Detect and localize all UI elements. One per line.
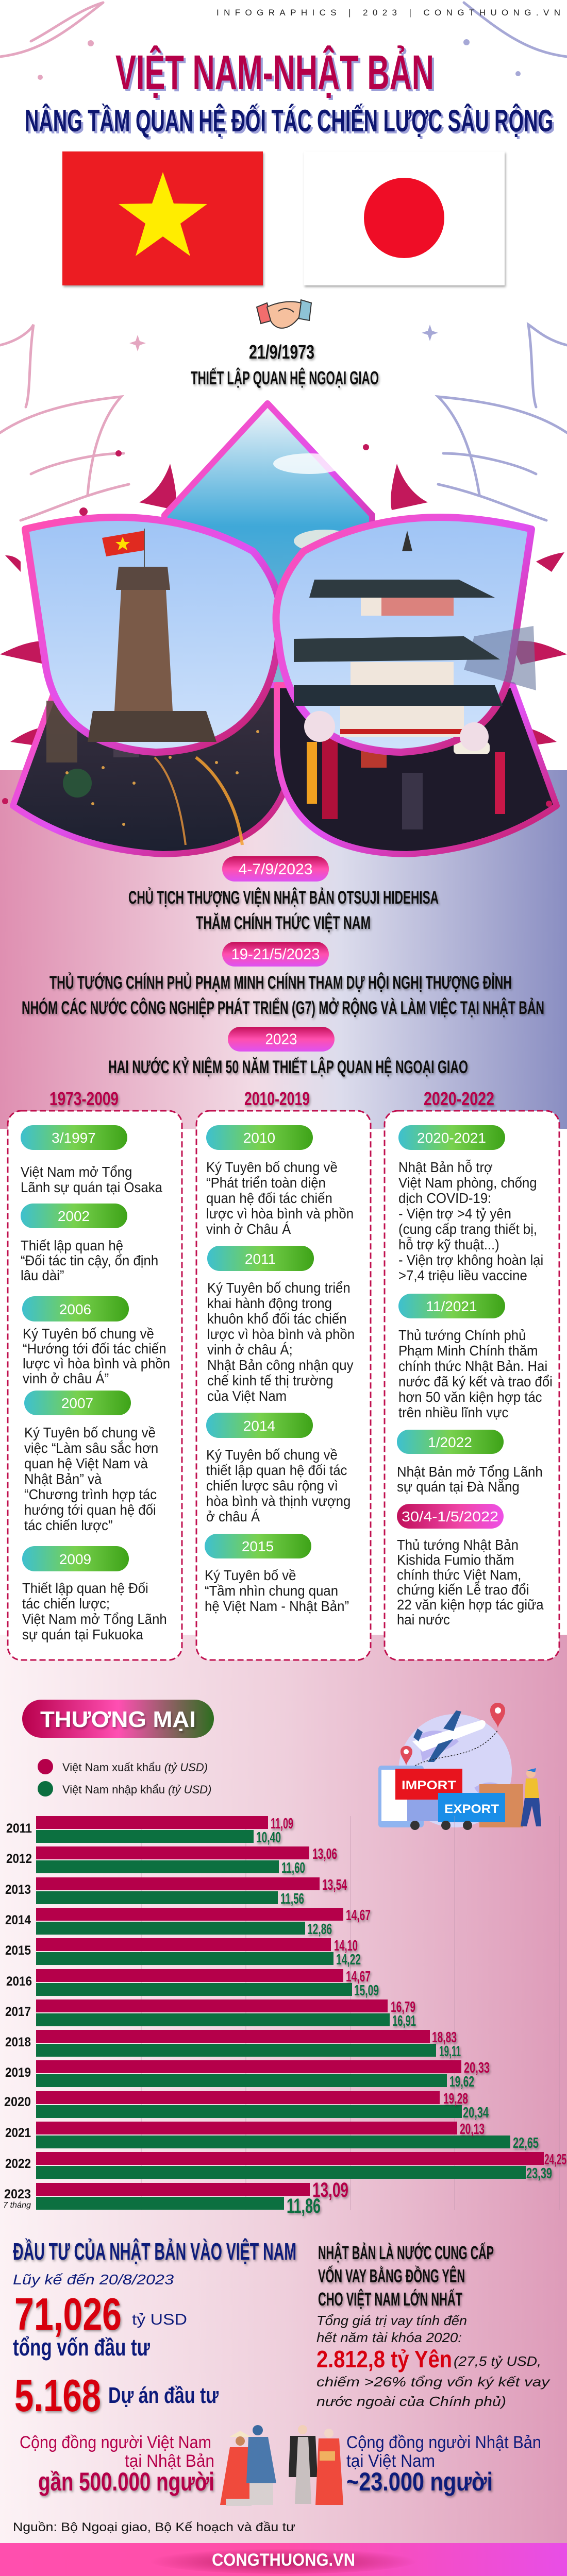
bar chart: trade 2011-2023: 12,86 [307,1921,332,1938]
community: Vietnamese in Japan: tại Nhật Bản [125,2451,214,2471]
petal: pagoda [276,517,536,752]
panel: 2010-2019 timeline: Nhật Bản công nhận quy [207,1357,354,1373]
year labels: 2013 [5,1883,31,1897]
text: establish diplomatic relations: THIẾT LẬP QUAN HỆ NGOẠI GIAO [191,367,379,388]
period headings [49,1088,494,1109]
header tagline: INFOGRAPHICS | 2023 | CONGTHUONG.VN [216,8,560,18]
panel: 2020-2022 timeline: Nhật Bản hỗ trợ [398,1159,493,1175]
panel: 1973-2009 timeline: Việt Nam mở Tổng [21,1164,132,1180]
community: Japanese in Vietnam: tại Việt Nam [346,2451,435,2471]
value labels: 20,33 [464,2060,490,2076]
panel: 2010-2019 timeline: của Việt Nam [207,1388,287,1404]
panel: 2010-2019 timeline [196,1111,371,1660]
panel: 2010-2019 timeline: lược vì hòa bình và phồn [206,1206,354,1222]
panel: 1973-2009 timeline: Thiết lập quan hệ Đối [22,1580,148,1596]
footer: CONGTHUONG.VN [212,2550,355,2570]
panel: 2010-2019 timeline: “Tầm nhìn chung quan [205,1583,338,1599]
panel: 2010-2019 timeline: “Phát triển toàn diện [206,1175,326,1191]
panel: 2020-2022 timeline: hai nước [397,1612,450,1628]
value labels: 19,28 [443,2091,468,2107]
value labels: 14,67 [346,1907,371,1924]
panel: 1973-2009 timeline: Việt Nam mở Tổng Lãnh [22,1611,167,1627]
bar chart: trade 2011-2023: 14,22 [336,1952,361,1968]
year labels: 2022 [5,2157,31,2171]
icon: import/export illustration: EXPORT [444,1802,499,1816]
pill 3/1997: 3/1997 [52,1130,96,1146]
value labels: 18,83 [432,2029,457,2046]
investment stats: 71,026 [14,2289,122,2340]
value labels: 13,09 [312,2179,348,2201]
value labels: 11,09 [271,1816,293,1832]
panel: 1973-2009 timeline: “Đối tác tin cậy, ổn định [21,1252,158,1268]
panel: 1973-2009 timeline: việc “Làm sâu sắc hơn [24,1439,158,1456]
panel: 1973-2009 timeline: “Hướng tới đối tác chiến [23,1341,166,1357]
decorative swirls [0,3,567,520]
panel: 2020-2022 timeline: Thủ tướng Chính phủ [398,1327,526,1343]
value labels: 16,79 [391,1999,415,2015]
flag: Vietnam [62,151,263,285]
bar chart: trade 2011-2023: 11,86 [287,2195,321,2217]
date 21/9/1973: 21/9/1973 [249,342,314,363]
panel: 1973-2009 timeline: 2007 [61,1395,93,1411]
leaves behind [0,464,567,747]
panel: 2010-2019 timeline: 2011 [245,1251,276,1267]
yen loan panel: 2.812,8 tỷ Yên [316,2346,452,2372]
investment stats: tỷ USD [132,2311,187,2328]
yen loan panel [316,2242,551,2409]
panel: 2010-2019 timeline: 2014 [243,1418,275,1434]
panel: 2010-2019 timeline: hệ Việt Nam - Nhật Bản” [205,1598,349,1614]
heading: THƯƠNG MẠI: THƯƠNG MẠI [40,1707,196,1732]
panel: 2020-2022 timeline: Nhật Bản mở Tổng Lãnh [397,1464,543,1480]
panel: 1973-2009 timeline: lược vì hòa bình và phồn [23,1355,170,1371]
period headings: 2020-2022 [424,1088,494,1109]
value labels [271,1816,566,2201]
icon: import/export illustration: IMPORT [402,1778,456,1792]
bar chart: trade 2011-2023: 10,40 [256,1829,281,1846]
panel: 2020-2022 timeline: Phạm Minh Chính thăm [398,1343,538,1359]
bar chart: trade 2011-2023: 19,11 [439,2043,461,2060]
investment stats: 5.168 [14,2370,101,2421]
panel: 2010-2019 timeline: chế kinh tế thị trường [207,1372,333,1388]
panel: 2020-2022 timeline: 30/4-1/5/2022 [402,1509,498,1524]
panel: 2020-2022 timeline: chứng kiến Lễ trao đổi [397,1581,529,1598]
community: Vietnamese in Japan [20,2433,214,2496]
panel: 2020-2022 timeline: 11/2021 [426,1298,477,1314]
panel: 1973-2009 timeline: Thiết lập quan hệ [21,1238,123,1253]
panel: 2020-2022 timeline: - Viện trợ không hoàn lại [398,1252,543,1268]
panel: 1973-2009 timeline: 2002 [58,1208,90,1224]
panel: 1973-2009 timeline: tác chiến lược” [24,1517,112,1533]
legend [38,1759,211,1797]
period headings: 1973-2009 [49,1088,119,1109]
panel: 2020-2022 timeline: chính thức Nhật Bản. Hai [398,1358,547,1374]
community: Japanese in Vietnam: Cộng đồng người Nhật Bản [346,2433,541,2452]
year labels: 2014 [5,1913,31,1927]
pill: 2023 [228,1027,335,1052]
yen loan panel: VỐN VAY BẰNG ĐỒNG YÊN [318,2265,465,2286]
yen loan panel: nước ngoài của Chính phủ) [316,2394,506,2409]
value labels: 13,06 [312,1846,337,1862]
source: Nguồn: Bộ Ngoại giao, Bộ Kế hoạch và đầu tư [13,2520,295,2534]
panel: 2010-2019 timeline: khuôn khổ đối tác chiến [207,1311,347,1327]
bar chart: trade 2011-2023: 11,56 [280,1891,304,1907]
year labels: 2023 [4,2187,31,2201]
panel: 2020-2022 timeline [385,1111,559,1660]
panel: 1973-2009 timeline: Ký Tuyên bố chung về [24,1425,156,1440]
yen loan panel: hết năm tài khóa 2020: [316,2330,462,2345]
icon: import/export illustration [378,1703,541,1830]
heading: Japanese investment in Vietnam: ĐẦU TƯ CỦA NHẬT BẢN VÀO VIỆT NAM [13,2238,296,2265]
value labels: 14,67 [346,1969,371,1985]
lotus photo collage [0,403,567,854]
panel: 2010-2019 timeline: vinh ở Châu Á [206,1221,291,1237]
year labels: 2017 [5,2005,31,2019]
panel: 2010-2019 timeline: Ký Tuyên bố chung triển [207,1280,351,1296]
panel: 2020-2022 timeline: 2020-2021 [417,1130,486,1146]
panel: 2010-2019 timeline: ở châu Á [206,1509,260,1524]
legend: Việt Nam nhập khẩu (tỷ USD) [62,1783,211,1796]
panel: 2010-2019 timeline: lược vì hòa bình và phồn [207,1326,355,1342]
yen loan panel: Tổng giá trị vay tính đến [316,2313,467,2328]
year labels: 2011 [6,1821,32,1836]
year labels [3,1821,32,2210]
bar chart: trade 2011-2023: 23,39 [526,2165,552,2182]
bar chart: trade 2011-2023: 20,34 [463,2105,489,2121]
investment stats [13,2272,219,2421]
bar chart: trade 2011-2023: 19,62 [449,2074,474,2090]
illustration: people in traditional dress [220,2425,343,2506]
panel: 2020-2022 timeline: Việt Nam phòng, chống [398,1175,537,1191]
yen loan panel: CHO VIỆT NAM LỚN NHẤT [318,2288,462,2310]
panel: 2010-2019 timeline: thiết lập quan hệ đối tác [206,1462,347,1478]
legend: Việt Nam xuất khẩu (tỷ USD) [62,1761,208,1774]
panel: 1973-2009 timeline: Ký Tuyên bố chung về [23,1326,154,1342]
panel: 1973-2009 timeline: sự quán tại Fukuoka [22,1626,143,1642]
investment stats: Lũy kế đến 20/8/2023 [13,2272,174,2287]
year labels: 2018 [5,2035,31,2049]
panel: 2020-2022 timeline: Thủ tướng Nhật Bản [397,1537,519,1553]
panel: 2010-2019 timeline: quan hệ đối tác chiến [206,1190,332,1206]
panel: 1973-2009 timeline: vinh ở châu Á” [23,1370,109,1386]
panel: 1973-2009 timeline: quan hệ Việt Nam và [24,1455,148,1471]
panel: 1973-2009 timeline: 2006 [59,1301,91,1317]
panel: 1973-2009 timeline: 2009 [59,1551,91,1567]
value labels: 13,54 [322,1877,347,1893]
yen loan panel: chiếm >26% tổng vốn ký kết vay [316,2374,551,2389]
community: Japanese in Vietnam: ~23.000 người [346,2467,493,2496]
panel: 2010-2019 timeline: 2015 [242,1538,274,1554]
event text: Otsuji Hidehisa visit: THĂM CHÍNH THỨC VIỆT NAM [196,912,371,933]
footer [0,2543,567,2576]
investment stats: tổng vốn đầu tư [13,2334,151,2361]
bar chart: trade 2011-2023: 11,60 [281,1860,305,1876]
panel: 2010-2019 timeline: khai hành động trong [207,1295,332,1311]
bar chart: trade 2011-2023 [3,1816,566,2217]
panel: 1973-2009 timeline: lâu dài” [21,1267,64,1283]
value labels: 20,13 [460,2121,485,2138]
petal: top sky [164,403,372,711]
panel: 2020-2022 timeline: (cung cấp trang thiết bị, [398,1221,537,1237]
petal: bottom-left night city [13,685,293,854]
panel: 1973-2009 timeline: Lãnh sự quán tại Osaka [21,1179,162,1195]
panel: 2020-2022 timeline: trên nhiều lĩnh vực [398,1404,508,1420]
panel: 2010-2019 timeline: 2010 [243,1130,275,1146]
year labels: 2012 [6,1852,32,1866]
panel: 1973-2009 timeline: Nhật Bản” và [24,1471,102,1487]
yen loan panel: (27,5 tỷ USD, [454,2353,541,2369]
pill: 4-7/9/2023 [222,856,329,882]
pill 3/1997 [21,1125,127,1150]
panel: 2020-2022 timeline: dịch COVID-19: [398,1190,491,1206]
petal: Hanoi flag tower [25,517,280,752]
petal: bottom-right Shibuya street [277,685,557,854]
panel: 2020-2022 timeline: 22 văn kiện hợp tác giữa [397,1597,544,1613]
community: Vietnamese in Japan: gần 500.000 người [38,2467,214,2496]
event text: Otsuji Hidehisa visit [128,887,439,933]
year labels: 7 tháng [3,2201,31,2210]
panel: 2020-2022 timeline: - Viện trợ >4 tỷ yên [398,1206,511,1222]
panel: 1973-2009 timeline [8,1111,182,1660]
panel: 1973-2009 timeline: “Chương trình hợp tác [24,1486,157,1502]
panel: 2010-2019 timeline: hòa bình và thịnh vượng [206,1493,351,1509]
year labels: 2020 [4,2095,31,2109]
panel: 2010-2019 timeline: chiến lược sâu rộng vì [206,1478,338,1494]
panel: 2020-2022 timeline: hỗ trợ kỹ thuật...) [398,1236,499,1252]
year labels: 2019 [5,2065,31,2080]
panel: 2020-2022 timeline: Kishida Fumio thăm [397,1552,514,1568]
pill: 19-21/5/2023: 19-21/5/2023 [231,946,320,963]
bar chart: trade 2011-2023: 22,65 [513,2135,539,2151]
panel: 2010-2019 timeline: Ký Tuyên bố chung về [206,1447,338,1463]
panel: 1973-2009 timeline: hướng tới quan hệ đối [24,1502,156,1518]
year labels: 2015 [5,1943,31,1958]
panel: 2020-2022 timeline: >7,4 triệu liều vaccine [398,1267,527,1283]
bar chart: trade 2011-2023: 16,91 [392,2013,416,2029]
panel: 2020-2022 timeline: sự quán tại Đà Nẵng [397,1478,520,1495]
panel: 2020-2022 timeline: chính thức Việt Nam, [397,1567,521,1583]
icon: handshake [257,300,311,328]
panel: 2010-2019 timeline: vinh ở châu Á; [207,1342,293,1358]
panel: 2020-2022 timeline: 1/2022 [428,1434,472,1450]
heading: THƯƠNG MẠI [22,1700,214,1738]
year labels: 2021 [5,2126,31,2140]
period headings: 2010-2019 [244,1088,310,1109]
pill: 19-21/5/2023 [222,942,329,967]
event text: G7 summit [22,972,544,1018]
panel: 2010-2019 timeline: Ký Tuyên bố về [205,1567,296,1583]
bar chart: trade 2011-2023: 15,09 [354,1982,379,1999]
flag: Japan [304,151,505,285]
investment stats: Dự án đầu tư [108,2383,219,2408]
pill: 2023: 2023 [265,1031,297,1048]
panel: 2020-2022 timeline: nước đã ký kết và trao đổi [398,1374,553,1389]
community: Vietnamese in Japan: Cộng đồng người Việt Nam [20,2433,211,2452]
panel: 2010-2019 timeline: Ký Tuyên bố chung về [206,1159,338,1175]
community: Japanese in Vietnam [346,2433,541,2496]
pill: 4-7/9/2023: 4-7/9/2023 [238,861,312,878]
panel: 2020-2022 timeline: hơn 50 văn kiện hợp tác [398,1389,542,1405]
year labels: 2016 [6,1974,32,1989]
value labels: 14,10 [334,1938,358,1954]
panel: 1973-2009 timeline: tác chiến lược; [22,1596,110,1612]
